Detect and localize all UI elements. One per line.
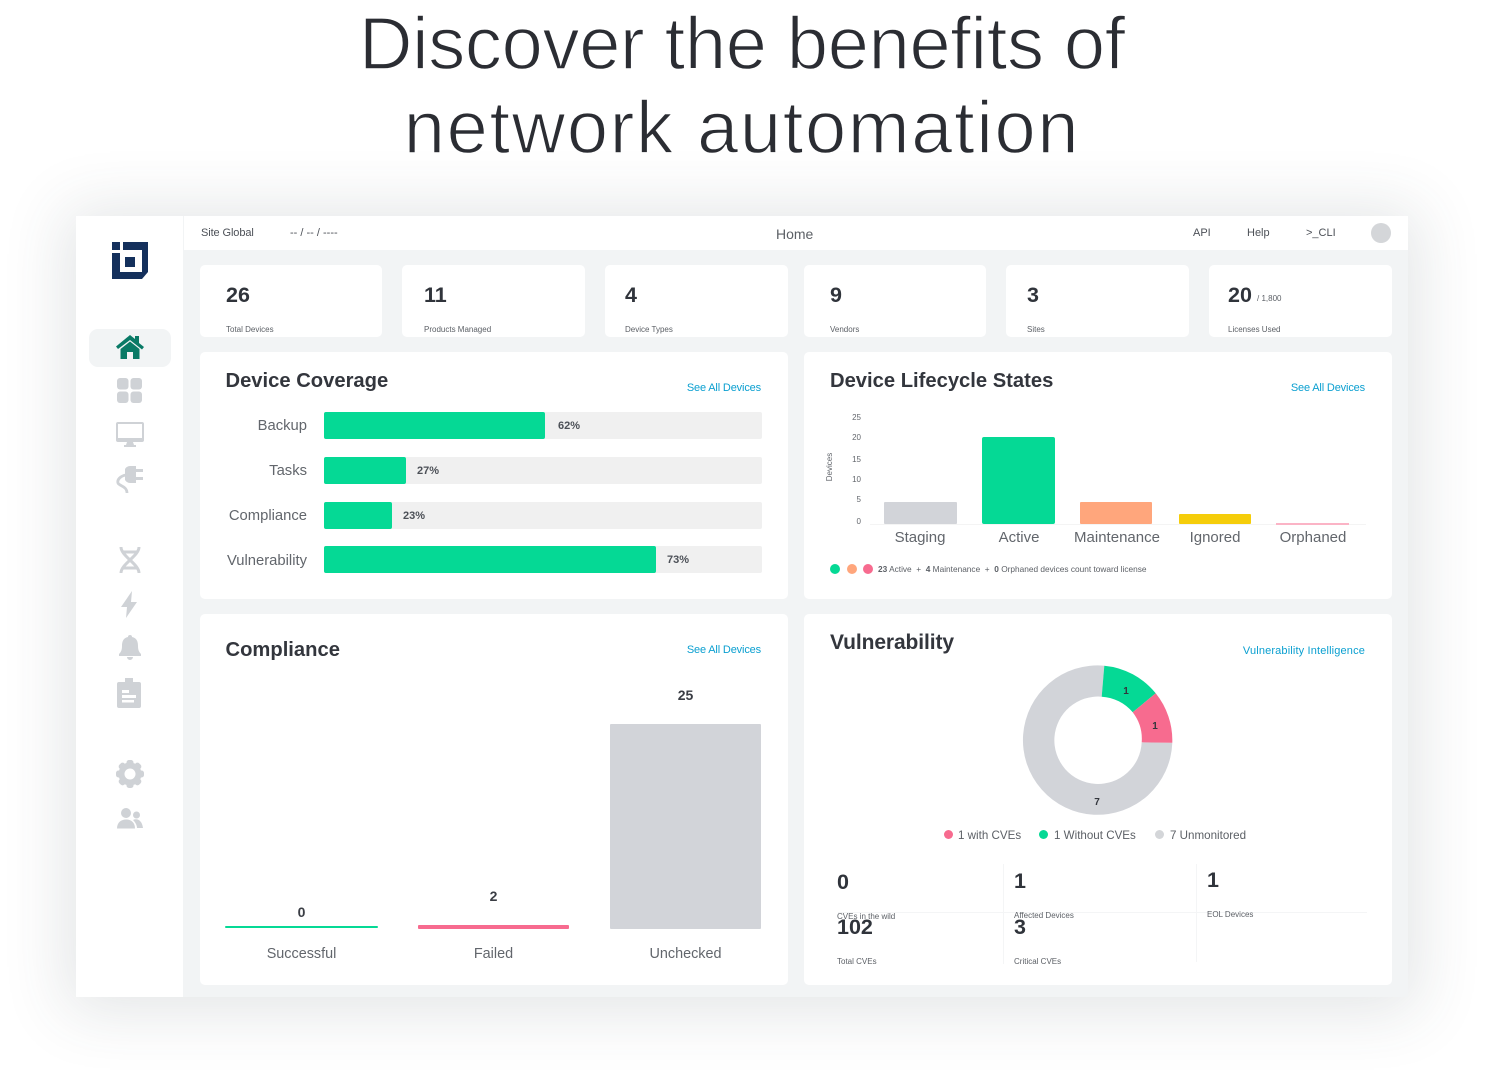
row: backup: Backup (258, 418, 307, 434)
stat card: vendors: 9 (830, 283, 842, 307)
bar chart (870, 412, 1366, 525)
dashboard window (76, 216, 1408, 997)
panel: device coverage (200, 352, 788, 599)
metric: EOL devices: EOL Devices (1207, 910, 1253, 919)
link: See All Devices (687, 382, 761, 394)
y axis ticks: 15 (852, 455, 861, 464)
icon: home (116, 335, 144, 359)
panel: top bar (184, 216, 1408, 250)
top bar: date: -- / -- / ---- (290, 227, 338, 239)
title (359, 2, 1125, 169)
divider grid (838, 864, 1367, 964)
panel: compliance (200, 614, 788, 985)
top bar: site: Site Global (201, 227, 254, 239)
stat card: licenses used (1209, 265, 1392, 337)
slice: with CVEs (1133, 693, 1172, 743)
donut legend (944, 829, 1246, 842)
column: failed (418, 888, 569, 962)
donut values (1094, 686, 1158, 808)
heading: Device Lifecycle States (830, 370, 1053, 392)
category labels (895, 529, 1346, 546)
icon: logo (112, 242, 148, 279)
icon: settings gear (116, 760, 144, 788)
title: Discover the benefits of (359, 2, 1125, 85)
panel: device lifecycle states (804, 352, 1392, 599)
stat card: licenses used: Licenses Used (1228, 325, 1280, 334)
metric: critical CVEs: 3 (1014, 915, 1026, 939)
bar: maintenance (1080, 502, 1152, 524)
metric: CVEs in the wild: CVEs in the wild (837, 912, 895, 921)
column: failed: 2 (490, 888, 497, 904)
stat card: products managed: 11 (424, 283, 447, 307)
row: tasks (269, 457, 762, 484)
bar: staging (884, 502, 957, 524)
heading: Compliance (226, 639, 340, 661)
row: backup: 62% (558, 420, 580, 432)
column: failed: Failed (474, 946, 513, 962)
donut values: 7 (1094, 797, 1100, 808)
metric: EOL devices: 1 (1207, 868, 1219, 892)
icon: clipboard (117, 678, 141, 708)
link: See All Devices (1291, 382, 1365, 394)
row: vulnerability: Vulnerability (227, 552, 307, 568)
icon: bell (119, 635, 141, 660)
category labels: Active (999, 529, 1039, 546)
category labels: Staging (895, 529, 945, 546)
row: vulnerability: 73% (667, 554, 689, 566)
column: unchecked: Unchecked (650, 946, 722, 962)
top bar: CLI: >_CLI (1306, 227, 1336, 239)
stat card: vendors (804, 265, 986, 337)
row: tasks: Tasks (269, 463, 307, 479)
stat card: device types: 4 (625, 283, 637, 307)
metric: critical CVEs (1014, 915, 1061, 966)
stat card: device types (605, 265, 788, 337)
category labels: Maintenance (1074, 529, 1160, 546)
stat card: total devices: Total Devices (226, 325, 274, 334)
category labels: Ignored (1190, 529, 1240, 546)
icon: monitor (116, 422, 144, 447)
avatar (1371, 223, 1391, 243)
link: Vulnerability Intelligence (1243, 645, 1365, 657)
row: compliance: 23% (403, 510, 425, 522)
stat card: sites: Sites (1027, 325, 1045, 334)
y axis ticks: 10 (852, 475, 861, 484)
category labels: Orphaned (1280, 529, 1346, 546)
axis title: Devices (825, 453, 834, 481)
stat card: licenses used: 20 (1228, 283, 1252, 307)
column: successful: 0 (298, 904, 305, 920)
stat card: total devices: 26 (226, 283, 250, 307)
stat card: products managed: Products Managed (424, 325, 491, 334)
stat card: vendors: Vendors (830, 325, 859, 334)
link: See All Devices (687, 644, 761, 656)
donut values: 1 (1123, 686, 1129, 697)
panel: sidebar (76, 216, 183, 997)
y axis ticks: 20 (852, 433, 861, 442)
metric: critical CVEs: Critical CVEs (1014, 957, 1061, 966)
slice: unmonitored (1023, 665, 1172, 815)
icon: dashboard grid (117, 378, 142, 403)
stat card: licenses used: / 1,800 (1257, 294, 1281, 303)
top bar: help: Help (1247, 227, 1270, 239)
icon: users (117, 808, 143, 828)
stat card: total devices (200, 265, 382, 337)
donut legend: 7 Unmonitored (1170, 829, 1246, 842)
heading: Vulnerability (830, 631, 954, 654)
panel: vulnerability (804, 614, 1392, 985)
stat card: sites: 3 (1027, 283, 1039, 307)
y axis ticks: 25 (852, 413, 861, 422)
column: successful: Successful (267, 946, 336, 962)
column: unchecked (610, 687, 761, 962)
metric: affected devices: 1 (1014, 869, 1026, 893)
metric: EOL devices (1207, 868, 1254, 919)
donut legend: 1 with CVEs (958, 829, 1021, 842)
row: compliance: Compliance (229, 508, 307, 524)
y axis ticks: 0 (857, 517, 861, 526)
slice: without CVEs (1102, 666, 1156, 712)
icon: dna (120, 547, 140, 573)
stat card: device types: Device Types (625, 325, 673, 334)
row: vulnerability (227, 546, 762, 573)
column: successful (225, 904, 378, 962)
icon: bolt (121, 591, 137, 618)
metric: affected devices: Affected Devices (1014, 911, 1074, 920)
bar: orphaned (1276, 523, 1349, 525)
metric: total CVEs: Total CVEs (837, 957, 877, 966)
metric: CVEs in the wild: 0 (837, 870, 849, 894)
metric: total CVEs: 102 (837, 915, 873, 939)
row: compliance (229, 502, 762, 529)
metric: affected devices (1014, 869, 1074, 920)
nav item: home active (89, 329, 171, 367)
top bar: page name: Home (776, 226, 813, 242)
metric: total CVEs (837, 915, 877, 966)
license legend: 23 Active + 4 Maintenance + 0 Orphaned devices count toward license (878, 564, 1146, 574)
stat card: products managed (402, 265, 585, 337)
y axis ticks: 5 (857, 495, 861, 504)
metric: CVEs in the wild (837, 870, 895, 921)
column: unchecked: 25 (678, 687, 693, 703)
title: network automation (404, 86, 1080, 169)
y axis ticks (852, 413, 861, 526)
heading: Device Coverage (226, 370, 388, 392)
donut values: 1 (1152, 721, 1158, 732)
row: tasks: 27% (417, 465, 439, 477)
donut chart (1023, 665, 1172, 815)
icon: plug (116, 466, 143, 493)
bar: active (982, 437, 1055, 524)
stat card: sites (1006, 265, 1189, 337)
row: backup (258, 412, 762, 439)
top bar: API: API (1193, 227, 1211, 239)
donut legend: 1 Without CVEs (1054, 829, 1136, 842)
bar: ignored (1179, 514, 1251, 524)
